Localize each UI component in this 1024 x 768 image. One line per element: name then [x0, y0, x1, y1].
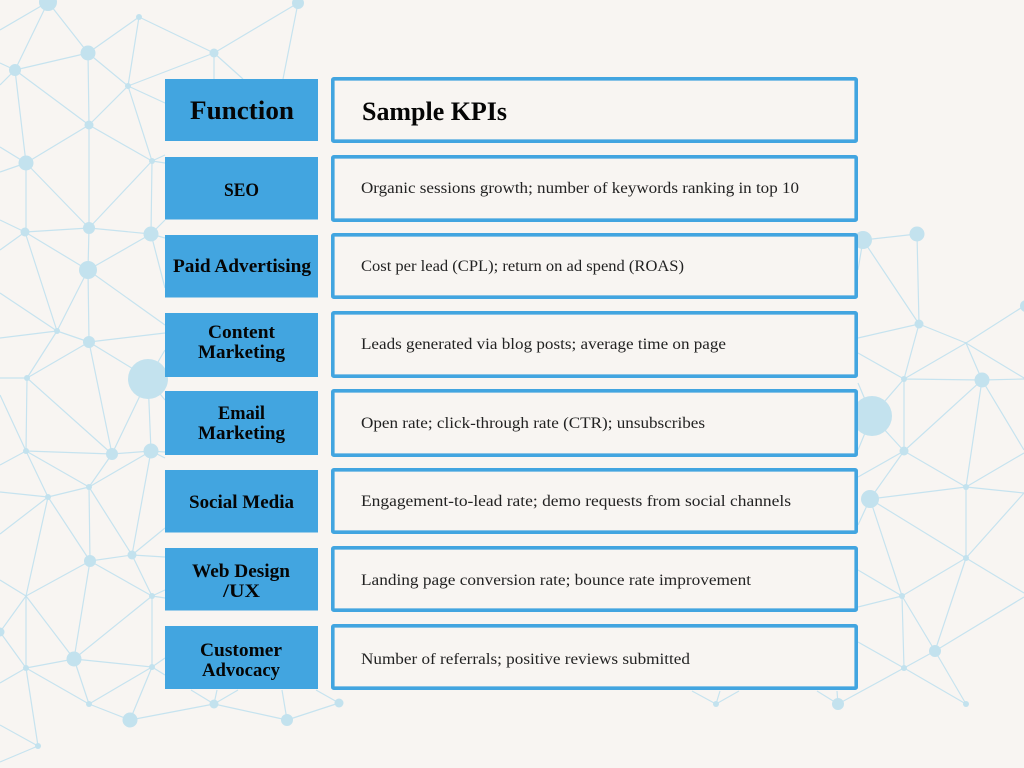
function label: Customer Advocacy: Advocacy [202, 661, 281, 681]
function label: Content Marketing: Content [208, 323, 276, 343]
table [165, 79, 856, 689]
KPI text: Paid Advertising: Cost per lead (CPL); return on ad spend (ROAS) [361, 258, 684, 275]
KPI text: Email Marketing [333, 391, 856, 455]
KPI text: SEO [333, 157, 856, 220]
function label: Email Marketing: Marketing [198, 424, 286, 444]
function label: Social Media: Social Media [189, 493, 294, 513]
function label: Email Marketing: Email [218, 404, 265, 424]
function label: Email Marketing [165, 391, 318, 455]
row: Social Media [165, 470, 856, 532]
function label: SEO: SEO [224, 181, 259, 201]
KPI text: Customer Advocacy: Number of referrals; positive reviews submitted [361, 651, 690, 668]
function label: Web Design /UX [165, 548, 318, 610]
KPI text: Social Media: Engagement-to-lead rate; demo requests from social channels [361, 493, 791, 510]
background network: left [0, 0, 344, 762]
KPI text: Email Marketing: Open rate; click-through rate (CTR); unsubscribes [361, 415, 705, 432]
KPI text: Content Marketing [333, 313, 856, 376]
row: Paid Advertising [165, 235, 856, 298]
row: Email Marketing [165, 391, 856, 455]
KPI text: Content Marketing: Leads generated via blog posts; average time on page [361, 336, 726, 353]
function label: Social Media [165, 470, 318, 532]
header row [165, 79, 856, 141]
function label: Customer Advocacy: Customer [200, 641, 282, 661]
KPI text: Web Design /UX: Landing page conversion rate; bounce rate improvement [361, 572, 752, 589]
function label: Content Marketing: Marketing [198, 343, 286, 363]
function label: Web Design /UX: Web Design [192, 562, 291, 582]
KPI text: Social Media [333, 470, 856, 532]
function label: Paid Advertising [165, 235, 318, 298]
heading: Function: Function [190, 96, 295, 125]
KPI text: Paid Advertising [333, 235, 856, 297]
row: Content Marketing [165, 313, 856, 377]
function label: Web Design /UX: /UX [222, 582, 261, 602]
heading: Function [165, 79, 318, 141]
background network: right [692, 226, 1024, 710]
KPI text: Customer Advocacy [333, 626, 856, 688]
function label: Customer Advocacy [165, 626, 318, 689]
row: Customer Advocacy [165, 626, 856, 689]
function label: Content Marketing [165, 313, 318, 377]
function label: Paid Advertising: Paid Advertising [173, 257, 312, 277]
heading: Sample KPIs [333, 79, 856, 141]
function label: SEO [165, 157, 318, 220]
row: Web Design /UX [165, 548, 856, 610]
row: SEO [165, 157, 856, 220]
heading: Sample KPIs: Sample KPIs [362, 97, 507, 126]
KPI text: Web Design /UX [333, 548, 856, 610]
KPI text: SEO: Organic sessions growth; number of keywords ranking in top 10 [361, 180, 799, 197]
